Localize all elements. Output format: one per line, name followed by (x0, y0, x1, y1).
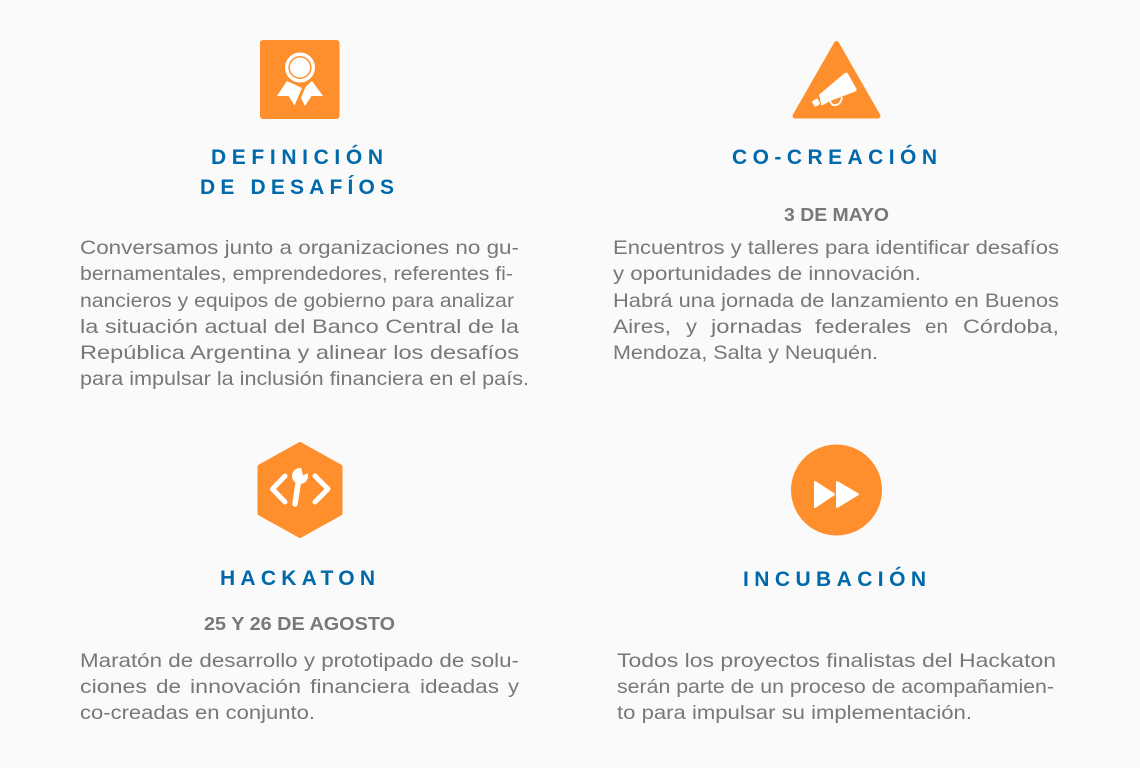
heading: definición de desafíos: DEFINICIÓN (211, 145, 383, 169)
text block: co-creación: Habrá una jornada de lanzamiento en Buenos (613, 290, 1059, 312)
text block: co-creación: y oportunidades de innovación. (613, 263, 921, 285)
text block: definición de desafíos (80, 237, 529, 390)
text block: hackaton: Maratón de desarrollo y prototipado de solu- (80, 650, 519, 672)
text block: co-creación: Mendoza, Salta y Neuquén. (613, 342, 878, 364)
text block: hackaton: ideadas (420, 676, 499, 698)
panel: definición de desafíos (80, 40, 529, 390)
text block: incubación: Todos los proyectos finalistas del Hackaton (617, 650, 1056, 672)
text block: co-creación: Encuentros y talleres para identificar desafíos (613, 237, 1059, 259)
text block: hackaton (80, 650, 519, 724)
text block: hackaton: financiera (310, 676, 410, 698)
heading: incubación: INCUBACIÓN (743, 567, 926, 591)
panel: hackaton (80, 444, 519, 724)
text block: definición de desafíos: nancieros y equipos de gobierno para analizar (80, 290, 515, 312)
text block: hackaton: co-creadas en conjunto. (80, 702, 315, 724)
icon: ribbon award (260, 40, 340, 119)
icon: fast forward circle (791, 444, 882, 536)
text block: co-creación: y (686, 316, 697, 338)
text block: definición de desafíos: Conversamos junto a organizaciones no gu- (80, 237, 519, 259)
text block: hackaton: ciones (80, 676, 147, 698)
panel: incubación (617, 444, 1056, 724)
text block: co-creación: jornadas (710, 316, 802, 338)
date: 25 y 26 de agosto: 25 Y 26 DE AGOSTO (204, 613, 395, 634)
panel: co-creación (613, 44, 1059, 364)
text block: co-creación: federales (815, 316, 911, 338)
text block: hackaton: y (508, 676, 519, 698)
heading: definición de desafíos (200, 145, 394, 199)
icon: megaphone triangle (795, 44, 878, 116)
date: 3 de mayo: 3 DE MAYO (784, 204, 889, 225)
text block: co-creación (613, 237, 1059, 364)
icon: code wrench hexagon (260, 444, 340, 536)
text block: hackaton: innovación (190, 676, 301, 698)
text block: incubación: to para impulsar su implementación. (617, 702, 972, 724)
text block: definición de desafíos: para impulsar la inclusión financiera en el país. (80, 368, 529, 390)
text block: co-creación: Córdoba, (963, 316, 1059, 338)
heading: hackaton: HACKATON (220, 567, 375, 590)
text block: incubación: serán parte de un proceso de acompañamien- (617, 676, 1054, 698)
text block: definición de desafíos: la situación actual del Banco Central de la (80, 316, 519, 338)
heading: definición de desafíos: DE DESAFÍOS (200, 176, 394, 199)
text block: hackaton: de (156, 676, 181, 698)
text block: definición de desafíos: bernamentales, emprendedores, referentes fi- (80, 263, 513, 285)
text block: co-creación: en (925, 316, 948, 338)
text block: definición de desafíos: República Argentina y alinear los desafíos (80, 342, 519, 364)
text block: co-creación: Aires, (613, 316, 671, 338)
text block: incubación (617, 650, 1056, 724)
heading: co-creación: CO-CREACIÓN (732, 145, 937, 169)
